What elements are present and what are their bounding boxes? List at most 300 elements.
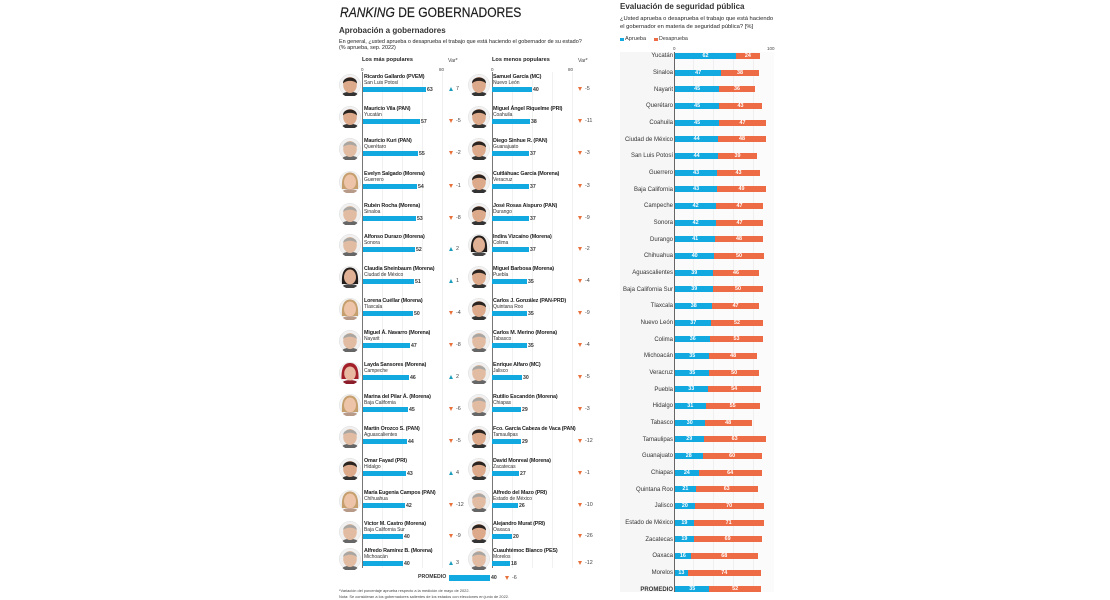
row: Tlaxcala: 47 bbox=[733, 303, 739, 309]
row: Morelos: 74 bbox=[721, 570, 727, 576]
row: Morelos: Morelos bbox=[652, 570, 673, 576]
row: María Eugenia Campos: 42 bbox=[406, 503, 412, 509]
row: Nayarit: 45 bbox=[694, 86, 700, 92]
row: Baja California Sur bbox=[620, 285, 775, 293]
row: Guanajuato: 28 bbox=[686, 453, 692, 459]
row: Sonora: Sonora bbox=[654, 220, 673, 226]
row: José Rosas Aispuro: José Rosas Aispuro (PAN) bbox=[493, 202, 557, 208]
row: Durango: Durango bbox=[650, 237, 673, 243]
row: Durango: 41 bbox=[692, 236, 698, 242]
row: Nuevo León bbox=[620, 319, 775, 327]
row: Rubén Rocha: 53 bbox=[417, 216, 423, 222]
row: Lorena Cuéllar: -4 bbox=[456, 310, 461, 316]
row: Mauricio Kuri: 55 bbox=[419, 151, 425, 157]
row: San Luis Potosí: 44 bbox=[694, 153, 700, 159]
row: Chiapas bbox=[620, 469, 775, 477]
row: Baja California: 43 bbox=[693, 186, 699, 192]
row: Alfredo Ramírez B. bbox=[339, 548, 459, 570]
row: Tamaulipas bbox=[620, 435, 775, 443]
row: Layda Sansores: 2 bbox=[456, 374, 459, 380]
row: Puebla: Puebla bbox=[654, 387, 673, 393]
row: Alejandro Murat bbox=[468, 520, 593, 543]
row: Nayarit: 36 bbox=[734, 86, 740, 92]
row: Omar Fayad: Hidalgo bbox=[364, 464, 381, 470]
row: María Eugenia Campos: -12 bbox=[456, 502, 464, 508]
row: Indira Vizcaíno: Colima bbox=[493, 240, 508, 246]
row: Cuauhtémoc Blanco: Morelos bbox=[493, 554, 510, 560]
row: Mauricio Vila: Mauricio Vila (PAN) bbox=[364, 106, 410, 112]
row: Nuevo León: Nuevo León bbox=[641, 320, 673, 326]
row: Martín Orozco S.: -5 bbox=[456, 438, 461, 444]
row: Ricardo Gallardo bbox=[339, 74, 459, 96]
row: Miguel Ángel Riquelme bbox=[468, 105, 592, 128]
row: Morelos bbox=[620, 569, 775, 577]
row: Tamaulipas: 29 bbox=[686, 436, 692, 442]
row: Alfredo del Mazo: Estado de México bbox=[493, 496, 532, 502]
row: Carlos M. Merino: -4 bbox=[585, 342, 590, 348]
row: Hidalgo: 31 bbox=[687, 403, 693, 409]
row: Miguel Barbosa: 35 bbox=[528, 279, 534, 285]
row: Diego Sinhue R.: 37 bbox=[530, 151, 536, 157]
row: Tamaulipas: Tamaulipas bbox=[643, 437, 673, 443]
row: Estado de México: 19 bbox=[681, 520, 687, 526]
heading: evaluación de seguridad pública: Evaluación de seguridad pública bbox=[620, 2, 744, 11]
row: Mauricio Vila: Yucatán bbox=[364, 112, 382, 118]
row: Miguel Ángel Riquelme: Miguel Ángel Riquelme (PRI) bbox=[493, 106, 562, 112]
row: José Rosas Aispuro: -9 bbox=[585, 215, 590, 221]
row: Coahuila bbox=[620, 119, 775, 127]
row: Veracruz: 35 bbox=[689, 370, 695, 376]
row: Campeche: 42 bbox=[693, 203, 699, 209]
row: Evelyn Salgado bbox=[339, 170, 461, 193]
row: Carlos M. Merino: Tabasco bbox=[493, 336, 511, 342]
row: Alejandro Murat: Alejandro Murat (PRI) bbox=[493, 520, 545, 526]
row: Alejandro Murat: 20 bbox=[513, 534, 519, 540]
footnotes bbox=[339, 588, 509, 599]
row: Lorena Cuéllar: Lorena Cuéllar (Morena) bbox=[364, 298, 423, 304]
row: Oaxaca bbox=[620, 552, 775, 560]
row: Puebla: 54 bbox=[731, 386, 737, 392]
row: Martín Orozco S.: Aguascalientes bbox=[364, 432, 397, 438]
row: Quintana Roo: Quintana Roo bbox=[636, 487, 673, 493]
axis scale right bbox=[491, 67, 573, 72]
legend bbox=[620, 36, 692, 42]
chart: security stacked bars bbox=[620, 52, 775, 594]
row: Tlaxcala: 38 bbox=[691, 303, 697, 309]
footnotes: Nota: Se consideran a los gobernadores salientes de los estados con elecciones en junio de 2022. bbox=[339, 594, 509, 598]
row: Michoacán: 35 bbox=[689, 353, 695, 359]
row: Michoacán: 48 bbox=[730, 353, 736, 359]
row: Yucatán: 62 bbox=[703, 53, 709, 59]
row: Claudia Sheinbaum: 1 bbox=[456, 278, 459, 284]
row: Indira Vizcaíno: -2 bbox=[585, 246, 590, 252]
row: Durango bbox=[620, 235, 775, 243]
row: Hidalgo: 55 bbox=[730, 403, 736, 409]
row: Víctor M. Castro bbox=[339, 520, 461, 543]
row: Promedio: PROMEDIO bbox=[640, 587, 673, 593]
row: Estado de México: 71 bbox=[726, 520, 732, 526]
row: Rutilio Escandón: Rutilio Escandón (Morena) bbox=[493, 394, 558, 400]
legend: Desaprueba bbox=[659, 36, 688, 42]
average row: 40 bbox=[491, 574, 497, 580]
row: María Eugenia Campos: Chihuahua bbox=[364, 496, 388, 502]
title: RANKING DE GOBERNADORES bbox=[340, 4, 521, 20]
row: Aguascalientes: 39 bbox=[691, 270, 697, 276]
row: Layda Sansores: Layda Sansores (Morena) bbox=[364, 362, 426, 368]
row: Oaxaca: 68 bbox=[721, 553, 727, 559]
row: Baja California: Baja California bbox=[634, 187, 673, 193]
row: Cuauhtémoc Blanco: -12 bbox=[585, 560, 593, 566]
row: Mauricio Vila: 57 bbox=[421, 119, 427, 125]
row: Diego Sinhue R.: Diego Sinhue R. (PAN) bbox=[493, 138, 547, 144]
row: David Monreal bbox=[468, 458, 590, 480]
row: Chihuahua bbox=[620, 252, 775, 260]
panel: most popular governors bbox=[339, 74, 464, 570]
row: Rutilio Escandón bbox=[468, 394, 590, 416]
row: Tabasco: Tabasco bbox=[651, 420, 673, 426]
row: Campeche bbox=[620, 202, 775, 210]
row: Jalisco: 70 bbox=[726, 503, 732, 509]
row: Colima: 53 bbox=[734, 336, 740, 342]
row: Rubén Rocha bbox=[339, 202, 461, 225]
column heading: most popular: Los más populares bbox=[362, 56, 413, 62]
row: Tabasco: 48 bbox=[725, 420, 731, 426]
row: Veracruz bbox=[620, 369, 775, 377]
row: Miguel Barbosa: -4 bbox=[585, 278, 590, 284]
row: Fco. García Cabeza de Vaca: 29 bbox=[522, 439, 528, 445]
row: Enrique Alfaro bbox=[468, 362, 590, 384]
row: Sinaloa: Sinaloa bbox=[653, 70, 673, 76]
row: Estado de México: Estado de México bbox=[625, 520, 673, 526]
question text: security bbox=[620, 15, 773, 32]
row: Marina del Pilar Á.: Marina del Pilar Á. (Morena) bbox=[364, 394, 431, 400]
row: Ricardo Gallardo: San Luis Potosí bbox=[364, 80, 398, 86]
row: Sinaloa: 47 bbox=[695, 70, 701, 76]
row: Víctor M. Castro: -9 bbox=[456, 533, 461, 539]
row: Carlos J. González: 35 bbox=[528, 311, 534, 317]
row: Querétaro: 45 bbox=[694, 103, 700, 109]
row: Nuevo León: 37 bbox=[690, 320, 696, 326]
row: Cuauhtémoc Blanco bbox=[468, 548, 593, 570]
row: Chiapas: 24 bbox=[684, 470, 690, 476]
row: Diego Sinhue R.: -3 bbox=[585, 150, 590, 156]
row: Oaxaca: Oaxaca bbox=[652, 553, 673, 559]
row: Sinaloa: 38 bbox=[737, 70, 743, 76]
axis scale left: 0 bbox=[361, 67, 364, 72]
row: Alfredo Ramírez B.: Alfredo Ramírez B. (Morena) bbox=[364, 548, 432, 554]
row: Rubén Rocha: Sinaloa bbox=[364, 209, 380, 215]
row: Samuel García bbox=[468, 74, 590, 96]
heading: aprobación a gobernadores: Aprobación a gobernadores bbox=[339, 26, 446, 34]
axis scale security: 100 bbox=[767, 46, 775, 50]
row: Alfonso Durazo bbox=[339, 234, 459, 256]
row: Fco. García Cabeza de Vaca: -12 bbox=[585, 438, 593, 444]
row: Rutilio Escandón: Chiapas bbox=[493, 400, 511, 406]
row: Tamaulipas: 63 bbox=[732, 436, 738, 442]
row: Chiapas: Chiapas bbox=[651, 470, 673, 476]
row: Marina del Pilar Á.: 45 bbox=[409, 407, 415, 413]
footnotes: *Variación del porcentaje aprueba respecto a la medición de mayo de 2022. bbox=[339, 588, 470, 593]
row: Chihuahua: Chihuahua bbox=[644, 253, 673, 259]
row: David Monreal: -1 bbox=[585, 470, 590, 476]
row: Michoacán bbox=[620, 352, 775, 360]
row: Fco. García Cabeza de Vaca bbox=[468, 426, 593, 448]
question text: approval bbox=[339, 39, 582, 51]
row: Marina del Pilar Á.: -6 bbox=[456, 406, 461, 412]
row: Alejandro Murat: -26 bbox=[585, 533, 593, 539]
row: Oaxaca: 16 bbox=[680, 553, 686, 559]
row: Querétaro: Querétaro bbox=[646, 103, 673, 109]
row: Claudia Sheinbaum: Claudia Sheinbaum (Morena) bbox=[364, 266, 434, 272]
row: Miguel Ángel Riquelme: Coahuila bbox=[493, 112, 512, 118]
row: Puebla: 33 bbox=[688, 386, 694, 392]
row: José Rosas Aispuro: Durango bbox=[493, 209, 512, 215]
row: Jalisco: 20 bbox=[682, 503, 688, 509]
row: Zacatecas: 19 bbox=[681, 536, 687, 542]
row: Alfredo Ramírez B.: 40 bbox=[404, 561, 410, 567]
row: Veracruz: 50 bbox=[731, 370, 737, 376]
average row: PROMEDIO bbox=[418, 574, 446, 580]
row: Morelos: 13 bbox=[678, 570, 684, 576]
row: Miguel Á. Navarro: Nayarit bbox=[364, 336, 380, 342]
row: San Luis Potosí: San Luis Potosí bbox=[631, 153, 673, 159]
row: Guerrero: 43 bbox=[736, 170, 742, 176]
row: San Luis Potosí: 39 bbox=[735, 153, 741, 159]
row: Guerrero bbox=[620, 169, 775, 177]
row: Evelyn Salgado: 54 bbox=[418, 184, 424, 190]
row: Alfredo del Mazo: 26 bbox=[519, 503, 525, 509]
panel: least popular governors bbox=[468, 74, 593, 570]
row: Mauricio Kuri bbox=[339, 138, 461, 160]
row: María Eugenia Campos bbox=[339, 490, 464, 512]
row: Martín Orozco S.: Martín Orozco S. (PAN) bbox=[364, 426, 420, 432]
row: Rutilio Escandón: -3 bbox=[585, 406, 590, 412]
row: Baja California Sur: 39 bbox=[691, 286, 697, 292]
row: Diego Sinhue R.: Guanajuato bbox=[493, 144, 518, 150]
row: Fco. García Cabeza de Vaca: Tamaulipas bbox=[493, 432, 518, 438]
row: Baja California Sur: 50 bbox=[735, 286, 741, 292]
row: Guanajuato bbox=[620, 452, 775, 460]
row: Durango: 48 bbox=[736, 236, 742, 242]
row: Layda Sansores: 46 bbox=[410, 375, 416, 381]
row: Alfredo del Mazo: -10 bbox=[585, 502, 593, 508]
row: Claudia Sheinbaum bbox=[339, 266, 459, 288]
row: Estado de México bbox=[620, 519, 775, 527]
row: Marina del Pilar Á. bbox=[339, 393, 461, 416]
row: Enrique Alfaro: Jalisco bbox=[493, 368, 508, 374]
row: Evelyn Salgado: -1 bbox=[456, 183, 461, 189]
row: Cuitláhuac García: Cuitláhuac García (Morena) bbox=[493, 170, 559, 176]
row: Ciudad de México: Ciudad de México bbox=[625, 137, 673, 143]
row: Michoacán: Michoacán bbox=[644, 353, 673, 359]
row: Samuel García: -5 bbox=[585, 86, 590, 92]
row: Guanajuato: Guanajuato bbox=[642, 453, 673, 459]
row: Aguascalientes: 46 bbox=[733, 270, 739, 276]
row: Martín Orozco S.: 44 bbox=[408, 439, 414, 445]
row: Indira Vizcaíno: Indira Vizcaíno (Morena) bbox=[493, 234, 552, 240]
row: Hidalgo bbox=[620, 402, 775, 410]
row: Layda Sansores bbox=[339, 362, 459, 384]
row: Guerrero: 43 bbox=[693, 170, 699, 176]
axis scale left bbox=[361, 67, 444, 72]
row: Sonora: 42 bbox=[693, 220, 699, 226]
row: Omar Fayad: Omar Fayad (PRI) bbox=[364, 458, 407, 464]
row: Puebla bbox=[620, 385, 775, 393]
row: Querétaro bbox=[620, 102, 775, 110]
question text: security: ¿Usted aprueba o desaprueba el trabajo que está haciendo bbox=[620, 16, 773, 22]
column heading: least popular: Los menos populares bbox=[492, 56, 550, 62]
row: Alfonso Durazo: Alfonso Durazo (Morena) bbox=[364, 234, 425, 240]
row: Claudia Sheinbaum: 51 bbox=[415, 279, 421, 285]
row: Omar Fayad: 43 bbox=[407, 471, 413, 477]
row: Chihuahua: 50 bbox=[736, 253, 742, 259]
row: Claudia Sheinbaum: Ciudad de México bbox=[364, 272, 403, 278]
row: Promedio: 35 bbox=[689, 586, 695, 592]
row: Campeche: 47 bbox=[736, 203, 742, 209]
row: Evelyn Salgado: Evelyn Salgado (Morena) bbox=[364, 170, 425, 176]
row: Yucatán bbox=[620, 52, 775, 60]
row: Miguel Á. Navarro: -8 bbox=[456, 342, 461, 348]
row: Enrique Alfaro: Enrique Alfaro (MC) bbox=[493, 362, 541, 368]
row: Cuauhtémoc Blanco: 18 bbox=[511, 561, 517, 567]
question text: approval: (% aprueba, sep. 2022) bbox=[339, 45, 396, 51]
row: Sinaloa bbox=[620, 69, 775, 77]
row: Zacatecas: Zacatecas bbox=[645, 537, 673, 543]
average row: -6 bbox=[512, 574, 517, 580]
row: Miguel Á. Navarro: Miguel Á. Navarro (Morena) bbox=[364, 330, 430, 336]
row: Rutilio Escandón: 29 bbox=[522, 407, 528, 413]
row: Quintana Roo: 21 bbox=[682, 486, 688, 492]
row: Omar Fayad: 4 bbox=[456, 470, 459, 476]
row: Rubén Rocha: Rubén Rocha (Morena) bbox=[364, 202, 420, 208]
row: Samuel García: Samuel García (MC) bbox=[493, 74, 541, 80]
row: Omar Fayad bbox=[339, 458, 459, 480]
row: Yucatán: Yucatán bbox=[651, 53, 673, 59]
row: Cuitláhuac García: 37 bbox=[530, 184, 536, 190]
average row bbox=[418, 574, 517, 581]
axis scale right: 80 bbox=[568, 67, 573, 72]
row: Chiapas: 64 bbox=[727, 470, 733, 476]
row: Carlos J. González: Carlos J. González (PAN-PRD) bbox=[493, 298, 566, 304]
row: Ricardo Gallardo: Ricardo Gallardo (PVEM) bbox=[364, 74, 424, 80]
column heading: var right: Var* bbox=[578, 58, 588, 64]
row: Sonora: 47 bbox=[736, 220, 742, 226]
row: Alfonso Durazo: Sonora bbox=[364, 240, 380, 246]
row: Carlos M. Merino: Carlos M. Merino (Morena) bbox=[493, 330, 557, 336]
row: Lorena Cuéllar: 50 bbox=[414, 311, 420, 317]
row: Miguel Barbosa: Puebla bbox=[493, 272, 508, 278]
row: Víctor M. Castro: Baja California Sur bbox=[364, 527, 405, 533]
row: Tabasco: 30 bbox=[687, 420, 693, 426]
column heading: var left: Var* bbox=[448, 58, 458, 64]
row: Zacatecas bbox=[620, 535, 775, 543]
row: José Rosas Aispuro bbox=[468, 202, 590, 225]
row: Ciudad de México bbox=[620, 135, 775, 143]
row: Colima: 36 bbox=[690, 336, 696, 342]
row: Alfonso Durazo: 52 bbox=[416, 247, 422, 253]
row: Rubén Rocha: -8 bbox=[456, 215, 461, 221]
row: Cuitláhuac García bbox=[468, 170, 590, 193]
row: Indira Vizcaíno bbox=[468, 234, 590, 256]
row: Alfonso Durazo: 2 bbox=[456, 246, 459, 252]
row: Nayarit bbox=[620, 85, 775, 93]
row: Enrique Alfaro: 30 bbox=[523, 375, 529, 381]
row: San Luis Potosí bbox=[620, 152, 775, 160]
row: Aguascalientes bbox=[620, 269, 775, 277]
row: Samuel García: Nuevo León bbox=[493, 80, 519, 86]
row: Tlaxcala bbox=[620, 302, 775, 310]
legend: Aprueba bbox=[625, 36, 646, 42]
row: Hidalgo: Hidalgo bbox=[653, 403, 673, 409]
row: Samuel García: 40 bbox=[533, 87, 539, 93]
row: Campeche: Campeche bbox=[644, 203, 673, 209]
row: Jalisco bbox=[620, 502, 775, 510]
row: Miguel Barbosa bbox=[468, 266, 590, 288]
row: Cuauhtémoc Blanco: Cuauhtémoc Blanco (PES) bbox=[493, 548, 558, 554]
row: Diego Sinhue R. bbox=[468, 138, 590, 160]
row: Querétaro: 43 bbox=[737, 103, 743, 109]
axis scale right: 0 bbox=[491, 67, 494, 72]
row: Víctor M. Castro: Víctor M. Castro (Morena) bbox=[364, 520, 426, 526]
row: Marina del Pilar Á.: Baja California bbox=[364, 400, 396, 406]
row: Carlos M. Merino bbox=[468, 330, 590, 352]
row: Cuitláhuac García: -3 bbox=[585, 183, 590, 189]
row: Mauricio Vila: -5 bbox=[456, 118, 461, 124]
row: Carlos J. González bbox=[468, 298, 590, 320]
row: Fco. García Cabeza de Vaca: Fco. García Cabeza de Vaca (PAN) bbox=[493, 426, 576, 432]
axis scale security bbox=[673, 46, 775, 52]
row: Aguascalientes: Aguascalientes bbox=[632, 270, 673, 276]
row: Sonora bbox=[620, 219, 775, 227]
row: Enrique Alfaro: -5 bbox=[585, 374, 590, 380]
axis scale left: 80 bbox=[439, 67, 444, 72]
row: Chihuahua: 40 bbox=[692, 253, 698, 259]
row: Alfredo del Mazo bbox=[468, 490, 593, 512]
row: Coahuila: 47 bbox=[739, 120, 745, 126]
row: Miguel Á. Navarro bbox=[339, 329, 461, 352]
row: Yucatán: 24 bbox=[745, 53, 751, 59]
row: Carlos J. González: Quintana Roo bbox=[493, 304, 523, 310]
row: Alfredo Ramírez B.: Michoacán bbox=[364, 554, 388, 560]
row: Baja California: 49 bbox=[738, 186, 744, 192]
row: Ricardo Gallardo: 7 bbox=[456, 86, 459, 92]
question text: security: el gobernador en materia de seguridad pública? [%] bbox=[620, 24, 753, 30]
row: Carlos J. González: -9 bbox=[585, 310, 590, 316]
row: Ciudad de México: 48 bbox=[739, 136, 745, 142]
row: Coahuila: Coahuila bbox=[649, 120, 673, 126]
row: Víctor M. Castro: 40 bbox=[404, 534, 410, 540]
row: Lorena Cuéllar: Tlaxcala bbox=[364, 304, 382, 310]
question text: approval: En general, ¿usted aprueba o desaprueba el trabajo que está haciendo el gobernador de su estado? bbox=[339, 39, 582, 45]
row: Miguel Ángel Riquelme: -11 bbox=[585, 118, 592, 124]
row: Zacatecas: 69 bbox=[725, 536, 731, 542]
axis scale security: 0 bbox=[673, 46, 676, 50]
row: David Monreal: Zacatecas bbox=[493, 464, 516, 470]
row: Mauricio Kuri: Mauricio Kuri (PAN) bbox=[364, 138, 412, 144]
row: Alfredo Ramírez B.: 3 bbox=[456, 560, 459, 566]
row: Mauricio Kuri: -2 bbox=[456, 150, 461, 156]
row: Tabasco bbox=[620, 419, 775, 427]
row: Mauricio Kuri: Querétaro bbox=[364, 144, 386, 150]
row: Tlaxcala: Tlaxcala bbox=[651, 303, 673, 309]
row: David Monreal: 27 bbox=[520, 471, 526, 477]
row: Indira Vizcaíno: 37 bbox=[530, 247, 536, 253]
row: Nayarit: Nayarit bbox=[654, 87, 673, 93]
row: Alfredo del Mazo: Alfredo del Mazo (PRI) bbox=[493, 490, 547, 496]
row: Baja California bbox=[620, 185, 775, 193]
row: Quintana Roo: 63 bbox=[724, 486, 730, 492]
row: Miguel Ángel Riquelme: 38 bbox=[531, 119, 537, 125]
